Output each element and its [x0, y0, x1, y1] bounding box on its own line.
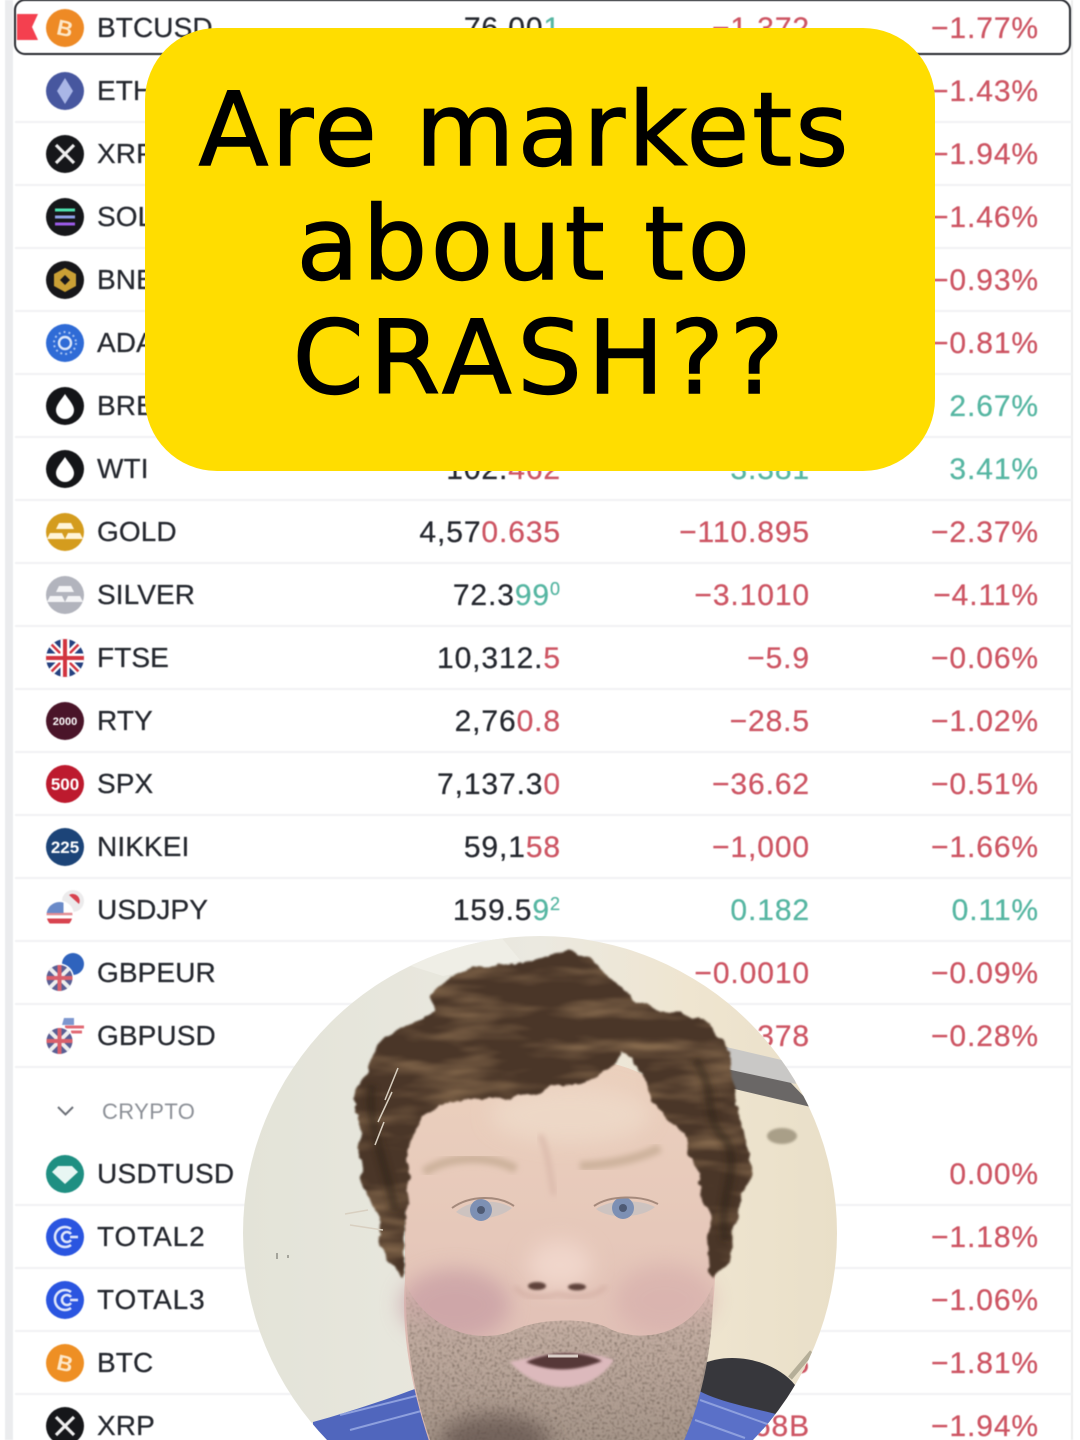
title: Are markets	[199, 71, 851, 190]
icon: bitcoin: B	[55, 1350, 75, 1377]
row: WTI: 102.462	[446, 453, 561, 486]
row: GBPUSD	[16, 1017, 1070, 1068]
row: RTY: −1.02%	[931, 705, 1039, 738]
row: USDJPY: USDJPY	[97, 894, 208, 925]
icon: oil drop	[45, 386, 85, 426]
row: SOL	[15, 185, 1072, 249]
row: XRP: −1.94%	[931, 138, 1039, 171]
row: FTSE: −5.9	[747, 642, 810, 675]
row: TOTAL3: TOTAL3	[97, 1284, 206, 1315]
row: SPX: SPX	[97, 768, 153, 799]
title badge	[145, 28, 935, 471]
row: WTI: WTI	[97, 453, 149, 484]
icon: xrp	[45, 1406, 85, 1440]
icon: bnb	[45, 260, 85, 300]
dark chair	[700, 1358, 795, 1430]
face	[400, 1059, 715, 1440]
row: USDTUSD	[15, 1142, 1072, 1206]
row: RTY: RTY	[97, 705, 153, 736]
brow furrow	[540, 1135, 554, 1195]
icon: total market cap	[45, 1280, 85, 1320]
wall specks	[277, 1253, 288, 1259]
row: GBPUSD: GBPUSD	[97, 1020, 216, 1051]
row: GBPEUR: GBPEUR	[97, 957, 216, 988]
icon: UK flag	[45, 638, 85, 678]
row: SPX	[15, 752, 1072, 816]
presenter portrait in circle	[243, 936, 837, 1440]
row: ETH	[15, 59, 1072, 123]
row: RTY: 2,760.8	[455, 705, 561, 738]
row: BTC: −1.81%	[931, 1347, 1039, 1380]
row: GBPUSD: −0.28%	[931, 1020, 1039, 1053]
row: BRENT: BRENT	[97, 390, 192, 421]
row: TOTAL3: −1.06%	[931, 1284, 1039, 1317]
row: ADA	[15, 311, 1072, 375]
chair rail	[790, 1352, 812, 1378]
row: SILVER: −3.1010	[694, 579, 810, 612]
row: BNB	[15, 248, 1072, 312]
row: SPX: −0.51%	[931, 768, 1039, 801]
row: USDJPY: 0.11%	[952, 894, 1039, 927]
row: GBPEUR: −0.09%	[931, 957, 1039, 990]
icon: red flag marker	[16, 13, 38, 41]
row: SILVER: SILVER	[97, 579, 195, 610]
row: ADA: −0.81%	[931, 327, 1039, 360]
row: FTSE: FTSE	[97, 642, 169, 673]
icon: GBP and USD flags	[46, 1017, 85, 1055]
icon: oil drop	[45, 449, 85, 489]
brows	[424, 1159, 516, 1172]
row: BTCUSD (selected): −1,372	[712, 12, 810, 45]
icon: cardano	[45, 323, 85, 363]
window sill highlight	[722, 1046, 796, 1084]
row: GOLD: −110.895	[679, 516, 810, 549]
row: BRENT: 2.67%	[949, 390, 1039, 423]
forehead highlight	[503, 1094, 638, 1137]
row: USDTUSD: USDTUSD	[97, 1158, 234, 1189]
row: TOTAL3	[15, 1268, 1072, 1332]
section heading: crypto	[56, 1099, 195, 1124]
window frame top right	[729, 1070, 809, 1106]
row: SILVER: 72.3990	[453, 579, 560, 612]
row: GOLD: −2.37%	[931, 516, 1039, 549]
section heading: crypto: CRYPTO	[102, 1099, 195, 1124]
ceiling edge	[412, 947, 466, 976]
eye right	[594, 1197, 658, 1219]
row: TOTAL2	[15, 1205, 1072, 1269]
row: RTY: −28.5	[730, 705, 810, 738]
row: XRP (crypto)	[15, 1394, 1072, 1440]
row: NIKKEI: −1.66%	[931, 831, 1039, 864]
row: WTI	[15, 437, 1072, 501]
row: GOLD: 4,570.635	[419, 516, 561, 549]
icon: tether	[45, 1154, 85, 1194]
row: SPX: −36.62	[712, 768, 810, 801]
row: BTC: 5	[792, 1347, 810, 1380]
row: GBPEUR	[16, 952, 1070, 1005]
row: FTSE	[16, 638, 1070, 690]
row: NIKKEI: 59,158	[464, 831, 561, 864]
row: BNB: −0.93%	[931, 264, 1039, 297]
row: SOL: −1.46%	[931, 201, 1039, 234]
eye left	[452, 1198, 514, 1221]
row: SILVER	[15, 563, 1072, 627]
row: SPX: 7,137.30	[437, 768, 561, 801]
row: FTSE: −0.06%	[931, 642, 1039, 675]
icon: solana	[45, 197, 85, 237]
row: XRP	[15, 122, 1072, 186]
row: NIKKEI: NIKKEI	[97, 831, 189, 862]
mouth	[510, 1353, 614, 1387]
nose	[515, 1241, 606, 1297]
row: GBPEUR: −0.0010	[694, 957, 810, 990]
row: XRP: XRPUSD	[97, 138, 214, 169]
selected row outline	[14, 0, 1071, 55]
row: BTC: BTC	[97, 1347, 153, 1378]
icon: gold bars	[45, 512, 85, 552]
wall fixture	[767, 1128, 797, 1144]
wet strands	[345, 1068, 398, 1230]
icon: GBP and EUR flags	[46, 952, 85, 992]
icon: Nikkei 225 badge	[45, 827, 85, 867]
icon: silver bars	[46, 576, 84, 614]
row: USDTUSD: 0.00%	[949, 1158, 1039, 1191]
icon: S&P 500 badge	[45, 764, 85, 804]
chin shadow	[440, 1414, 550, 1440]
row: SOL: SOLUSD	[97, 201, 213, 232]
row: BTCUSD (selected): −1.77%	[931, 12, 1039, 45]
row: ETH: −1.43%	[931, 75, 1039, 108]
icon: Russell 2000 badge	[45, 701, 85, 741]
beard	[406, 1285, 713, 1440]
row: USDJPY	[16, 890, 1070, 942]
row: SILVER: −4.11%	[933, 579, 1039, 612]
hair	[359, 950, 753, 1280]
row: TOTAL2: −1.18%	[931, 1221, 1039, 1254]
row: RTY	[15, 689, 1072, 753]
icon: ethereum	[45, 71, 85, 111]
row: BTCUSD (selected): BTCUSD	[97, 12, 213, 43]
icon: bitcoin	[45, 1343, 85, 1383]
icon: Nikkei 225 badge: 225	[51, 838, 79, 857]
row: BTCUSD (selected): 76,001	[464, 12, 561, 45]
row: NIKKEI: −1,000	[712, 831, 810, 864]
row: GOLD: GOLD	[97, 516, 177, 547]
row: BTC	[15, 1331, 1072, 1395]
shirt	[313, 1385, 780, 1440]
icon: xrp	[45, 134, 85, 174]
row: BNB: BNBUSD	[97, 264, 214, 295]
row: USDJPY: 159.592	[453, 894, 560, 927]
title	[198, 71, 851, 418]
row: ADA: ADAUSD	[97, 327, 214, 358]
title: about to	[296, 185, 754, 304]
icon: total market cap	[45, 1217, 85, 1257]
row: TOTAL2: TOTAL2	[97, 1221, 206, 1252]
row: GBPUSD: 378	[757, 1020, 810, 1053]
row: USDJPY: 0.182	[730, 894, 810, 927]
row: WTI: 3.381	[730, 453, 810, 486]
row: GOLD	[15, 500, 1072, 564]
icon: Russell 2000 badge: 2000	[53, 716, 77, 728]
cheek blush	[400, 1269, 510, 1341]
icon: USD and JPY flags	[46, 890, 84, 924]
row: FTSE: 10,312.5	[437, 642, 561, 675]
dark side curls	[371, 1060, 731, 1240]
title: CRASH??	[293, 299, 789, 418]
row: ETH: ETHUSD	[97, 75, 213, 106]
row: NIKKEI	[15, 815, 1072, 879]
icon: bitcoin	[45, 8, 85, 48]
row: BRENT	[15, 374, 1072, 438]
row: WTI: 3.41%	[949, 453, 1039, 486]
icon: bitcoin: B	[55, 15, 75, 42]
icon: S&P 500 badge: 500	[51, 775, 79, 794]
row: BTCUSD (selected)	[45, 8, 1039, 48]
wall background	[243, 936, 837, 1440]
